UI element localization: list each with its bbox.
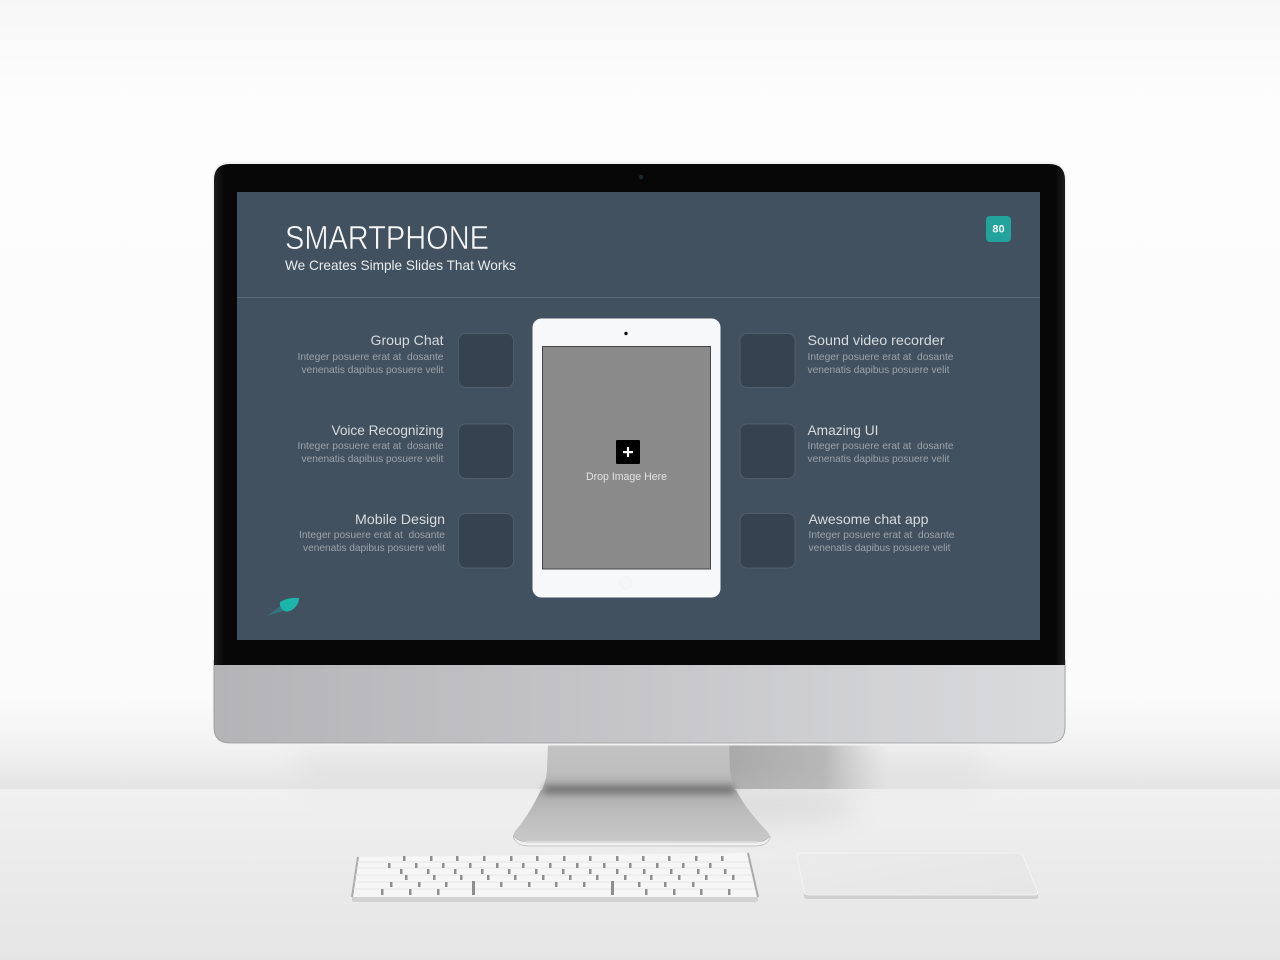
feature: Mobile Design <box>299 511 445 554</box>
drop label: Drop Image Here <box>586 471 667 483</box>
monitor <box>212 162 1066 746</box>
tablet screen placeholder <box>542 346 710 569</box>
feature: Group Chat: venenatis dapibus posuere velit <box>302 364 444 376</box>
monitor outer edge <box>212 162 1066 746</box>
feature: Awesome chat app: Integer posuere erat at dosante <box>808 529 955 541</box>
feature: Voice Recognizing: Voice Recognizing <box>332 422 444 438</box>
stand base lip <box>514 836 770 846</box>
keyboard body <box>352 853 758 897</box>
feature: Mobile Design: venenatis dapibus posuere velit <box>303 542 445 554</box>
trackpad front edge <box>804 894 1038 899</box>
keyboard side edges <box>352 853 758 897</box>
slide title: SMARTPHONE <box>285 219 489 256</box>
keyboard <box>352 853 758 902</box>
icon tile: Group Chat <box>458 334 514 388</box>
chin <box>214 660 1065 743</box>
icon: rocket logo <box>267 598 299 616</box>
monitor stand <box>513 743 770 846</box>
tablet camera <box>624 332 628 335</box>
feature: Mobile Design: Mobile Design <box>355 511 445 527</box>
feature: Amazing UI: venenatis dapibus posuere velit <box>808 453 950 465</box>
feature: Group Chat: Group Chat <box>370 332 444 348</box>
feature: Sound video recorder: Sound video recorder <box>808 332 945 348</box>
feature: Voice Recognizing: venenatis dapibus posuere velit <box>302 453 444 465</box>
feature: Amazing UI <box>808 422 954 465</box>
feature: Group Chat: Integer posuere erat at dosante <box>298 351 444 363</box>
keyboard key gaps <box>381 856 734 895</box>
feature: Sound video recorder: Integer posuere erat at dosante <box>808 351 954 363</box>
feature: Voice Recognizing <box>298 422 444 465</box>
icon tile: Mobile Design <box>458 514 514 568</box>
trackpad surface <box>797 853 1038 895</box>
icon tile: Awesome chat app <box>740 514 795 568</box>
feature: Sound video recorder: venenatis dapibus posuere velit <box>808 364 950 376</box>
trackpad <box>797 853 1038 899</box>
stand shadow band <box>544 785 734 794</box>
icon tile: Sound video recorder <box>740 334 795 388</box>
keyboard front edge <box>352 896 758 902</box>
feature: Amazing UI: Amazing UI <box>808 422 878 438</box>
black bezel <box>214 164 1065 665</box>
stand base <box>513 790 770 841</box>
icon tile: Amazing UI <box>740 424 795 478</box>
page number badge: 80 <box>992 224 1005 236</box>
slide screen <box>237 192 1040 640</box>
webcam <box>639 175 643 179</box>
slide subtitle: We Creates Simple Slides That Works <box>285 257 516 273</box>
feature: Mobile Design: Integer posuere erat at dosante <box>299 529 445 541</box>
stand neck <box>541 743 736 792</box>
feature: Awesome chat app <box>808 511 955 554</box>
feature: Voice Recognizing: Integer posuere erat at dosante <box>298 440 444 452</box>
page number badge <box>986 216 1011 242</box>
keyboard row lines <box>353 862 755 889</box>
soft shadow under monitor on wall <box>300 748 980 782</box>
feature: Amazing UI: Integer posuere erat at dosante <box>808 440 954 452</box>
home button <box>620 577 632 589</box>
feature: Sound video recorder <box>808 332 954 376</box>
header divider <box>237 297 1040 298</box>
stand shadow on desk <box>660 787 860 823</box>
icon tile: Voice Recognizing <box>458 424 514 478</box>
plus button <box>616 440 640 464</box>
desk surface <box>0 789 1280 960</box>
feature: Awesome chat app: venenatis dapibus posuere velit <box>808 542 951 554</box>
tablet body <box>532 318 720 598</box>
monitor shadow on wall <box>728 744 888 789</box>
feature: Group Chat <box>298 332 444 376</box>
feature: Awesome chat app: Awesome chat app <box>808 511 929 527</box>
tablet mockup <box>532 318 720 598</box>
